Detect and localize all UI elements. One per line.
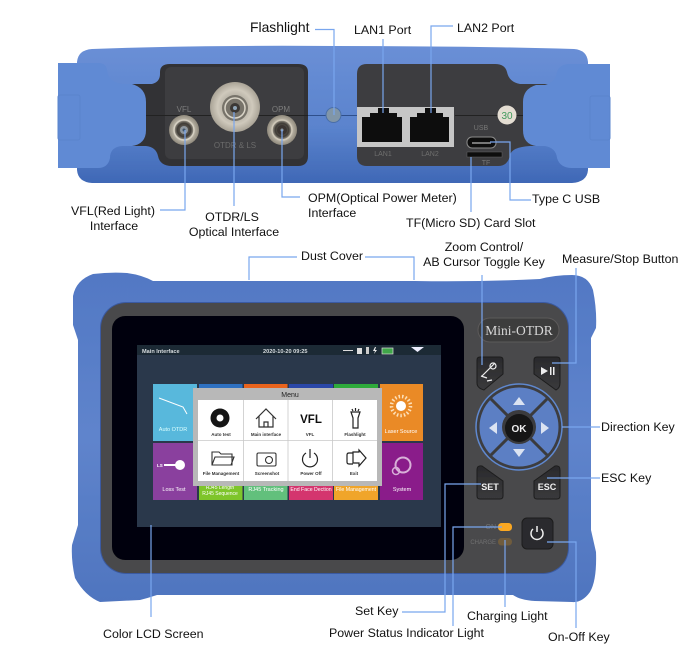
left optical panel: OTDR & LS	[214, 141, 256, 150]
app tiles	[153, 384, 423, 500]
menu item: VFL: VFL	[306, 432, 315, 437]
label: Set Key: Set Key	[355, 604, 399, 618]
TF card slot	[467, 152, 502, 157]
Mini-OTDR nameplate: Mini-OTDR	[485, 323, 553, 338]
right port panel: LAN1	[374, 151, 392, 158]
label: Power Status Indicator Light: Power Status Indicator Light	[329, 626, 485, 640]
RJ45 LAN ports	[357, 107, 454, 147]
label: OPM interface: Interface	[308, 206, 356, 220]
app tiles: End Face Dection	[290, 487, 332, 493]
ESC key	[534, 466, 560, 499]
indicator lights: ON	[486, 524, 496, 531]
menu item: Power Off: Power Off	[300, 471, 322, 476]
status bar	[137, 345, 441, 355]
direction pad: OK	[512, 424, 527, 435]
left optical panel: VFL	[177, 105, 192, 114]
on-off key	[522, 518, 553, 549]
menu item: Screenshot: Screenshot	[255, 471, 280, 476]
left dust flap	[58, 63, 146, 168]
connector: OPM	[267, 115, 297, 145]
measure stop button	[534, 357, 560, 390]
menu item: Auto test	[210, 408, 231, 437]
flashlight LED	[326, 108, 341, 122]
menu item: Flashlight: Flashlight	[344, 432, 366, 437]
label: VFL interface: Interface	[90, 219, 138, 233]
menu item: File Management: File Management	[203, 471, 240, 476]
USB Type C port	[467, 137, 496, 148]
menu item: Exit: Exit	[350, 471, 359, 476]
panel: top view of device	[58, 46, 610, 183]
label: OPM interface: OPM(Optical Power Meter)	[308, 191, 457, 205]
label: TF card slot: TF(Micro SD) Card Slot	[406, 216, 536, 230]
label: VFL interface: VFL(Red Light)	[71, 204, 155, 218]
left optical panel: OPM	[272, 105, 290, 114]
app tiles: Loss Test	[162, 487, 186, 493]
menu item: Main interface	[251, 409, 282, 437]
direction pad	[476, 384, 562, 470]
indicator lights: CHARGE	[470, 540, 496, 546]
app tiles: RJ45 Tracking	[248, 487, 284, 493]
menu item: Screenshot	[255, 453, 280, 476]
label: LAN1 Port: LAN1 Port	[354, 23, 412, 37]
menu item: VFL: VFL	[300, 414, 322, 426]
label: Charging Light: Charging Light	[467, 609, 548, 623]
label: Measure/Stop Button: Measure/Stop Button	[562, 252, 679, 266]
ESC key: ESC	[538, 482, 557, 492]
LCD display	[137, 345, 441, 527]
app tiles: System	[393, 487, 412, 493]
label: OTDR/LS interface: Optical Interface	[189, 225, 279, 239]
menu dialog	[193, 388, 382, 486]
panel: front view of device	[72, 273, 596, 602]
SET key: SET	[481, 482, 499, 492]
label: Type C USB: Type C USB	[532, 192, 600, 206]
dark bezel	[100, 302, 569, 574]
menu item: Exit	[347, 450, 366, 476]
label: Flashlight: Flashlight	[250, 19, 310, 35]
app tiles: Auto OTDR	[159, 427, 187, 433]
right port panel: USB	[474, 125, 489, 132]
indicator lights	[470, 523, 512, 546]
label: Dust Cover: Dust Cover	[301, 249, 363, 263]
label: Color LCD Screen: Color LCD Screen	[103, 627, 204, 641]
Mini-OTDR nameplate	[478, 318, 559, 342]
connector: OTDR and LS	[210, 82, 260, 132]
menu item: Main interface: Main interface	[251, 432, 282, 437]
label: On-Off Key: On-Off Key	[548, 630, 611, 644]
sticker: 30	[501, 111, 513, 122]
label: ESC Key: ESC Key	[601, 471, 652, 485]
menu dialog: Menu	[281, 392, 299, 399]
menu item: VFL	[300, 414, 322, 437]
menu item: Power Off	[300, 449, 322, 476]
rubber bumper	[72, 273, 596, 602]
control bezel	[101, 303, 568, 573]
menu item: Flashlight	[344, 408, 366, 437]
label: Zoom control: AB Cursor Toggle Key	[423, 255, 546, 269]
label: Zoom control: Zoom Control/	[445, 240, 523, 254]
menu item: Auto test: Auto test	[211, 432, 231, 437]
label: Direction Key: Direction Key	[601, 420, 675, 434]
app tiles: File Management	[336, 487, 377, 493]
right port panel: TF	[482, 160, 490, 167]
label: OTDR/LS interface: OTDR/LS	[205, 210, 259, 224]
sticker	[498, 106, 516, 124]
label: LAN2 Port: LAN2 Port	[457, 21, 515, 35]
right port panel	[357, 64, 548, 167]
app tiles: RJ45 Sequence	[202, 491, 238, 497]
SET key	[477, 466, 503, 499]
zoom control key	[477, 357, 503, 390]
left optical panel	[120, 64, 357, 166]
menu item: File Management	[203, 452, 240, 476]
right port panel: LAN2	[421, 151, 439, 158]
status bar: Main Interface	[142, 349, 180, 355]
app tiles: LS	[157, 463, 163, 468]
black screen glass	[112, 316, 464, 560]
right dust flap	[523, 64, 610, 168]
display background	[137, 345, 441, 527]
connector: VFL	[169, 115, 199, 145]
top device body	[77, 46, 588, 183]
leader lines	[151, 26, 600, 628]
app tiles: RJ45 Length	[206, 485, 234, 491]
app tiles: Laser Source	[385, 429, 417, 435]
status bar: 2020-10-20 09:25	[263, 349, 307, 355]
